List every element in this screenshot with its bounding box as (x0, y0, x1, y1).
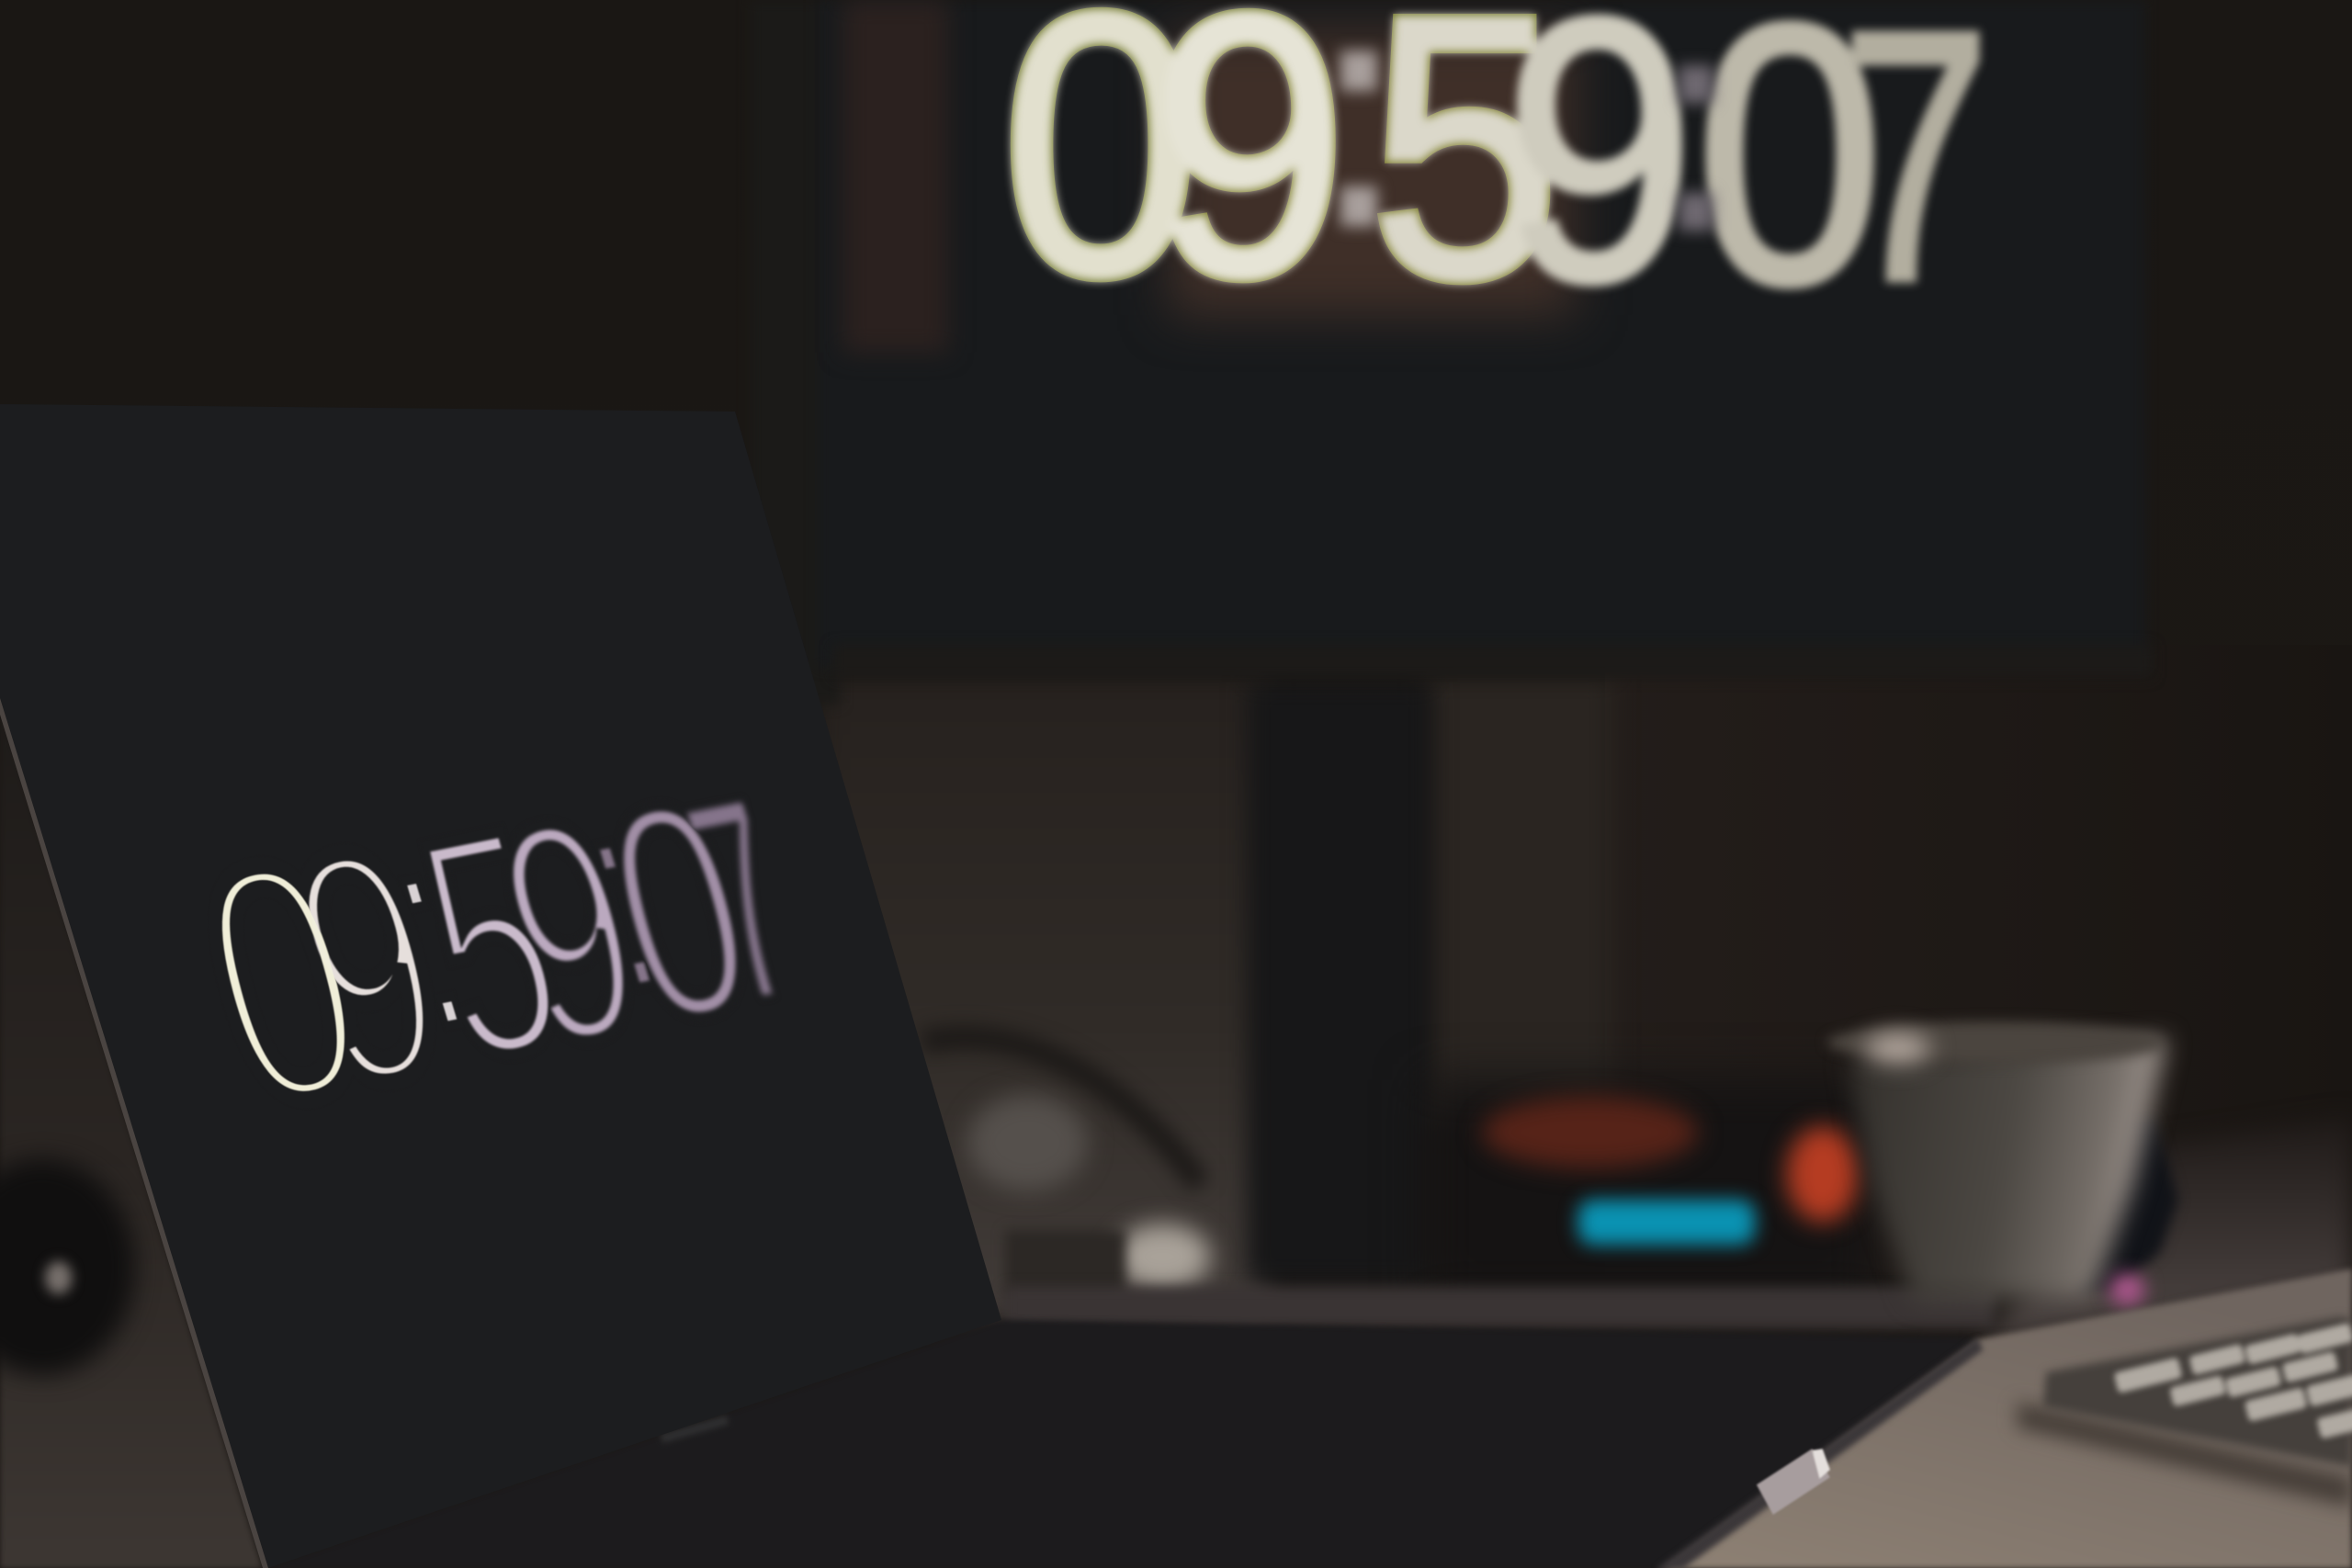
laptop clock reading 09:59:07: 0 (578, 735, 782, 1088)
blurred objects on desk (1114, 1224, 1211, 1290)
bright digits (1002, 0, 1990, 360)
red object highlight (1787, 1126, 1859, 1223)
base edge strip (1657, 1337, 1983, 1568)
glow behind clock (1170, 30, 1575, 315)
cable (922, 1038, 1200, 1185)
red object glow (1482, 1097, 1698, 1168)
mug (1827, 1021, 2167, 1302)
keyboard (2018, 1317, 2352, 1507)
keyboard shadow (2018, 1403, 2352, 1507)
laptop clock reading 09:59:07: : (358, 772, 492, 1089)
mug rim (1827, 1021, 2163, 1064)
mug body (1848, 1038, 2167, 1302)
monitor lower strip (832, 645, 2153, 678)
laptop lid top bezel (0, 404, 808, 698)
dark shelf area behind the objects (1425, 1080, 1875, 1304)
laptop clock reading 09:59:07: : (553, 741, 684, 1047)
monitor bezel (750, 0, 840, 705)
green-yellow fringe (1002, 0, 1559, 355)
hinge highlight (1757, 1449, 1830, 1515)
monitor body (818, 0, 2145, 668)
laptop clock reading 09:59:07: 5 (390, 761, 592, 1128)
wall below monitor (818, 675, 1268, 1320)
blue light (1578, 1200, 1755, 1245)
wall socket (967, 1095, 1088, 1190)
wall section beside stand (1425, 675, 1612, 1125)
laptop clock reading 09:59:07: 0 (168, 785, 399, 1179)
laptop clock reading 09:59:07 (221, 799, 775, 1092)
pink object (2109, 1273, 2145, 1306)
monitor clock reading 09:59:07 (1002, 0, 1990, 360)
colon dots (1317, 0, 1736, 291)
laptop screen (0, 404, 1001, 1568)
laptop badge (660, 1416, 729, 1443)
mug handle (2077, 1117, 2178, 1290)
left dim panel reflection (843, 0, 948, 353)
keyboard body (2043, 1317, 2352, 1467)
right wall (1605, 645, 2352, 1275)
keyboard keys (2113, 1323, 2352, 1439)
laptop clock reading 09:59:07: 7 (661, 739, 828, 1060)
dark round object at left (0, 1159, 135, 1375)
desk edge band (1005, 1287, 1995, 1329)
monitor stand (1248, 682, 1431, 1282)
laptop base (263, 1320, 1983, 1568)
desk surface (1657, 1269, 2352, 1568)
wall left of laptop (0, 705, 263, 1568)
round object highlight (45, 1261, 72, 1294)
hinge tip (1812, 1449, 1830, 1479)
desk back surface (1980, 1117, 2352, 1342)
mug rim highlight (1864, 1033, 1930, 1064)
laptop screen edge (0, 698, 268, 1568)
keyboard deck (263, 1320, 1977, 1568)
laptop clock reading 09:59:07: 9 (469, 750, 673, 1111)
laptop clock reading 09:59:07: 9 (260, 775, 478, 1158)
